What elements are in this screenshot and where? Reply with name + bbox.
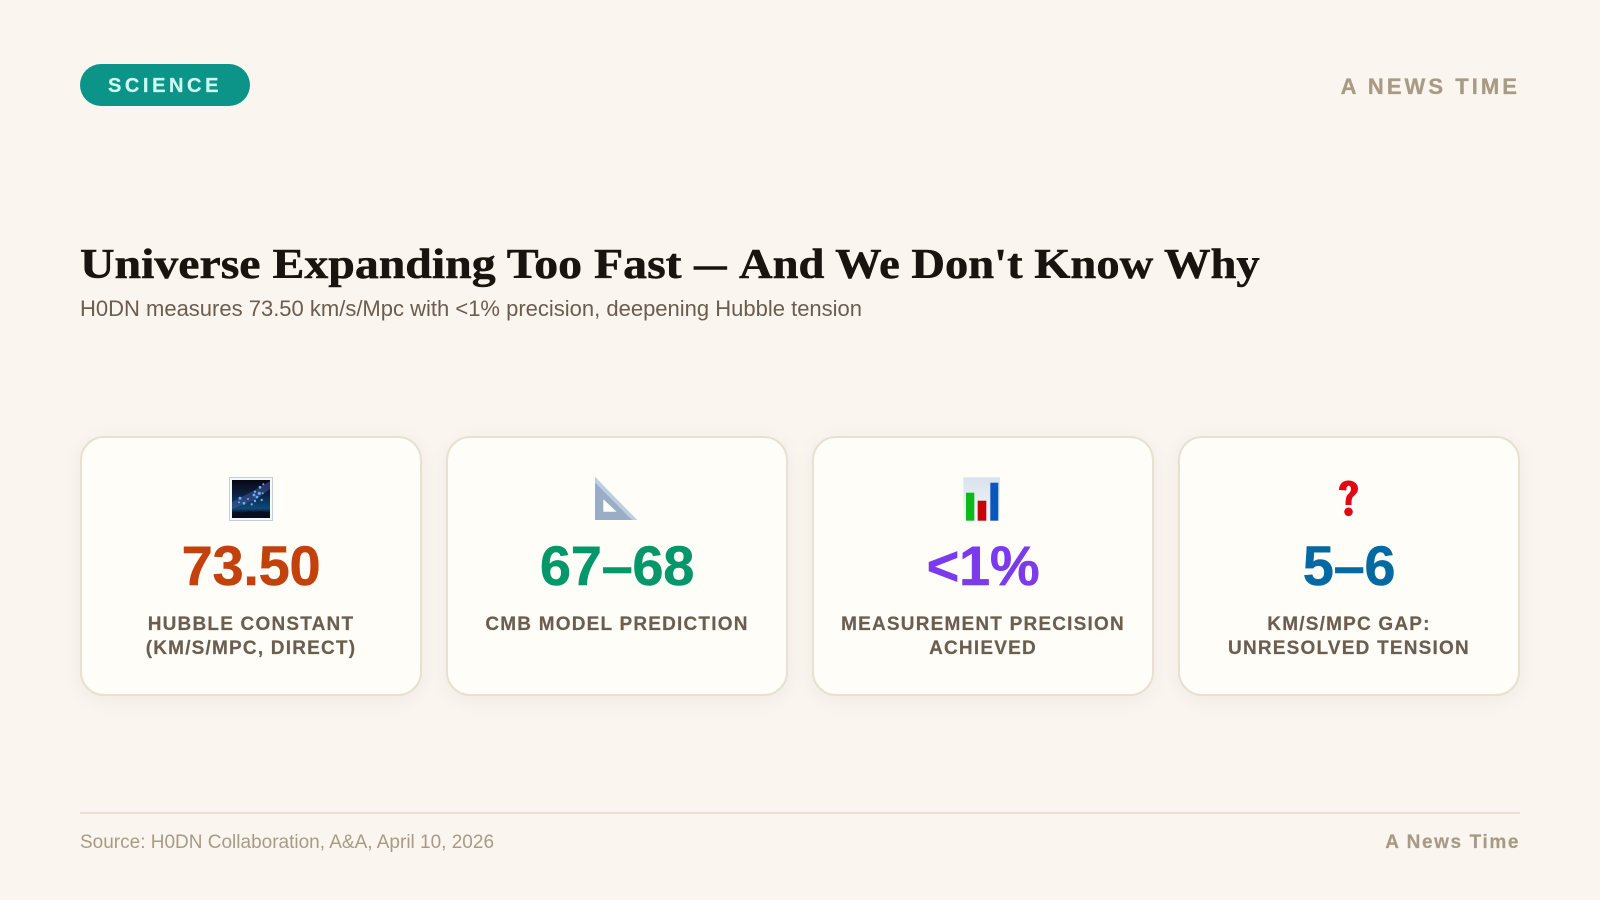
- stat label: UNRESOLVED TENSION: [1228, 638, 1470, 659]
- icon: red question mark: [1339, 480, 1358, 516]
- brand name: A NEWS TIME: [1341, 74, 1520, 99]
- panel: Hubble constant: [80, 436, 422, 696]
- title: Universe Expanding Too Fast: [80, 242, 682, 288]
- stat label: [146, 614, 356, 659]
- title: —: [694, 242, 727, 288]
- stat label: HUBBLE CONSTANT: [148, 614, 354, 635]
- stat label: KM/S/MPC GAP:: [1267, 614, 1431, 635]
- stat label: [841, 614, 1125, 659]
- stat value: <1%: [927, 534, 1039, 597]
- title: And We Don't Know Why: [739, 242, 1260, 288]
- footer brand: A News Time: [1385, 832, 1520, 853]
- category pill: [80, 64, 250, 106]
- stat label: ACHIEVED: [929, 638, 1037, 659]
- panel: precision: [812, 436, 1154, 696]
- title: [80, 242, 1260, 288]
- stat label: [1228, 614, 1470, 659]
- stat label: CMB MODEL PREDICTION: [485, 614, 749, 635]
- stat value: 73.50: [182, 534, 320, 597]
- stat value: 5–6: [1303, 534, 1395, 597]
- stat label: MEASUREMENT PRECISION: [841, 614, 1125, 635]
- panel: unresolved gap: [1178, 436, 1520, 696]
- icon: triangular ruler: [595, 477, 637, 520]
- icon: milky way: [229, 477, 273, 521]
- stat label: (KM/S/MPC, DIRECT): [146, 638, 356, 659]
- category pill: SCIENCE: [108, 75, 222, 97]
- panel: CMB prediction: [446, 436, 788, 696]
- source note: Source: H0DN Collaboration, A&A, April 10, 2026: [80, 832, 494, 853]
- subtitle: H0DN measures 73.50 km/s/Mpc with <1% precision, deepening Hubble tension: [80, 296, 862, 321]
- icon: bar chart: [963, 477, 1000, 521]
- stat value: 67–68: [540, 534, 694, 597]
